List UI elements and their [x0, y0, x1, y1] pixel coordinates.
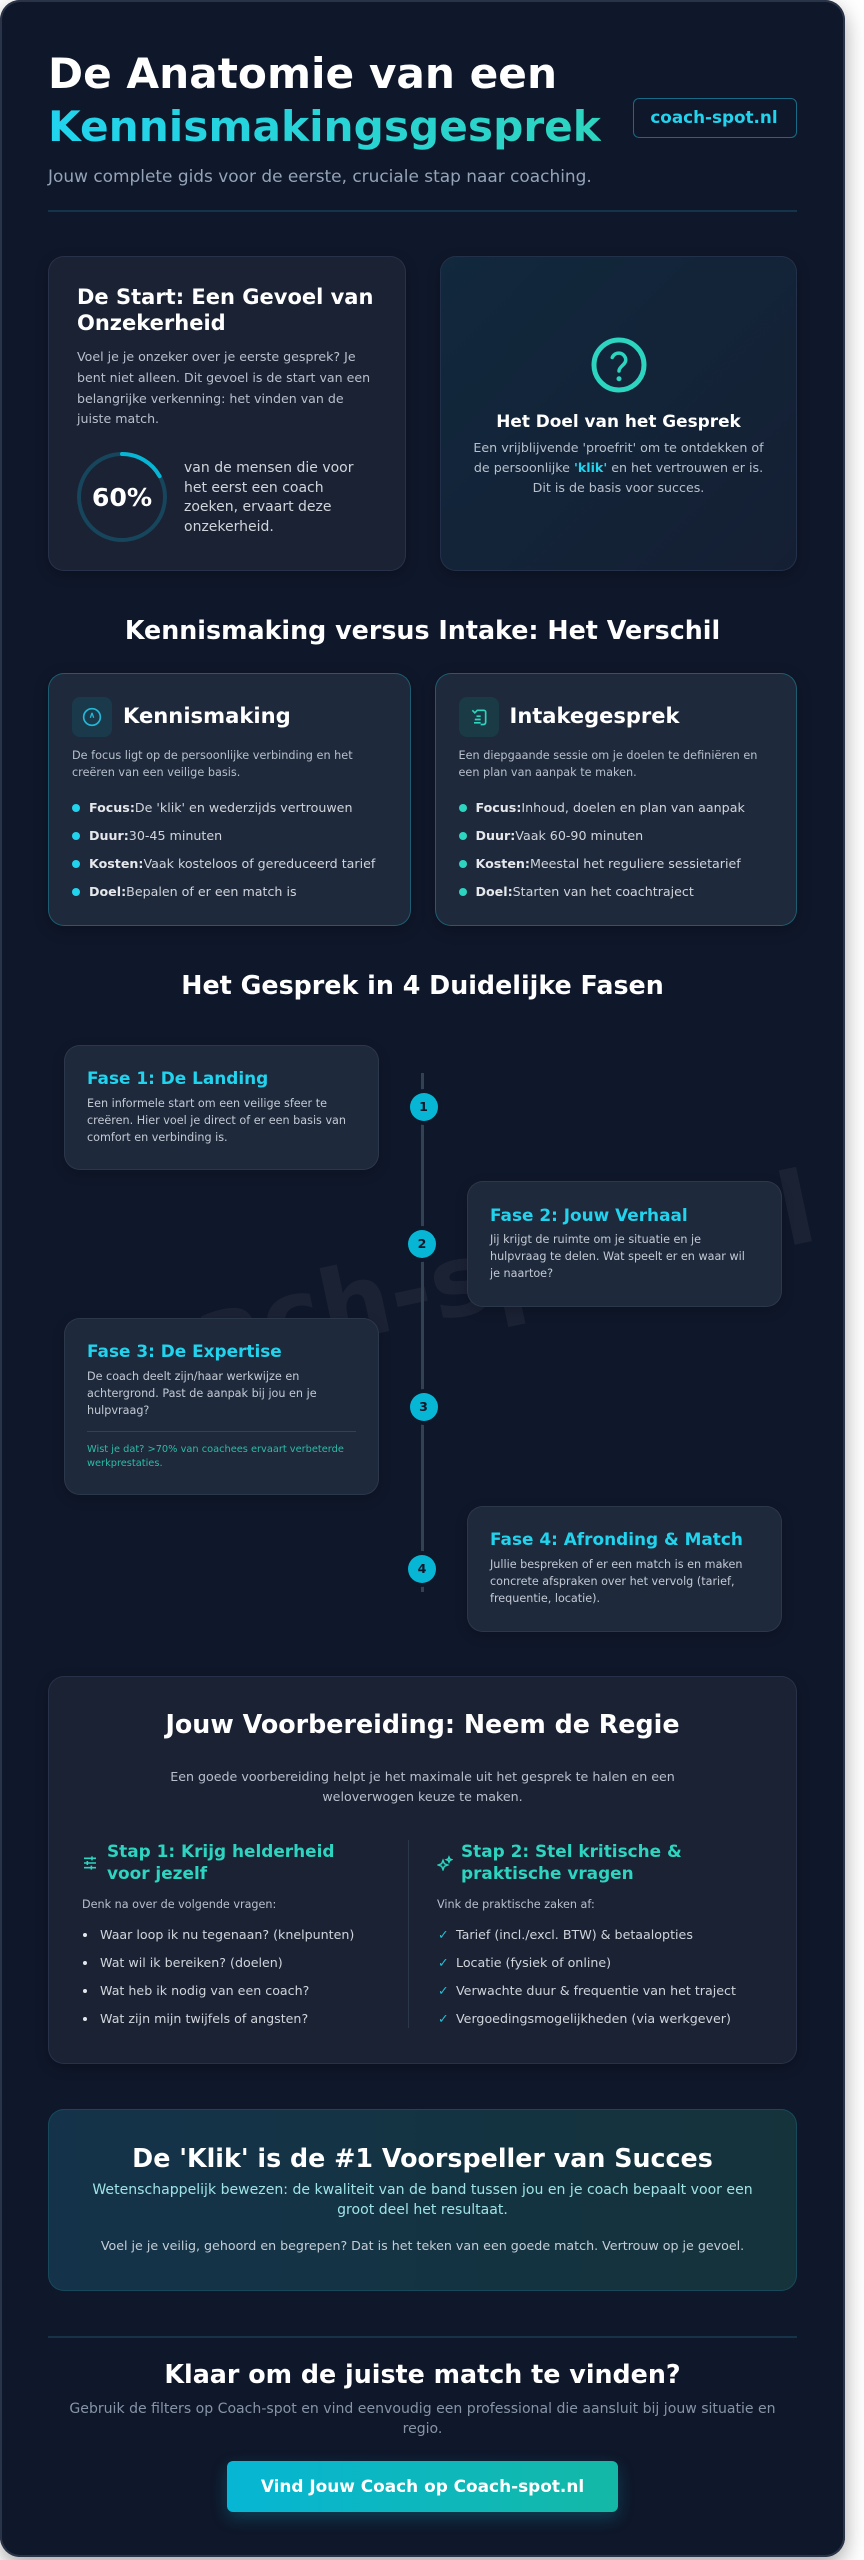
list: praktische zaken: ✓ — [438, 1983, 449, 1998]
list: praktische zaken: ✓ — [438, 1927, 449, 1942]
node 2: 2 — [418, 1236, 426, 1251]
watermark: coach-spot.nl — [59, 1148, 825, 1421]
text: statistic caption: zoeken, ervaart deze — [184, 499, 332, 515]
heading: vier fasen: Het Gesprek in 4 Duidelijke Fasen — [181, 970, 664, 1000]
icon: clipboard — [458, 697, 498, 737]
text: voorbereiding intro: weloverwogen keuze te maken. — [322, 1789, 523, 1804]
list: intake kenmerken: Duur:Vaak 60-90 minuten — [476, 828, 643, 843]
node 3: 3 — [419, 1399, 428, 1414]
text: call to action: regio. — [403, 2421, 442, 2437]
text: vertrouw op je gevoel: Voel je je veilig, gehoord en begrepen? Dat is het teken van een goede match. Vertrouw op je gevoel. — [101, 2238, 744, 2253]
text: fase 4: Jullie bespreken of er een match is en maken — [490, 1558, 742, 1571]
list: vragen: Wat wil ik bereiken? (doelen) — [100, 1955, 283, 1970]
text: intake description: Een diepgaande sessie om je doelen te definiëren en — [458, 749, 757, 762]
text: intake description: een plan van aanpak te maken. — [458, 766, 637, 779]
list: praktische zaken: ✓ — [438, 2011, 449, 2026]
heading: fase 3: Fase 3: De Expertise — [87, 1341, 282, 1361]
text: fase 3: De coach deelt zijn/haar werkwijze en — [87, 1370, 299, 1383]
list: kennismaking kenmerken: Duur:30-45 minuten — [89, 828, 222, 843]
text: fase 4 — [489, 1558, 742, 1605]
heading: stap 2: Stap 2: Stel kritische & — [461, 1841, 682, 1861]
text: fase 2: je naartoe? — [490, 1267, 553, 1280]
text: voorbereiding intro: Een goede voorbereiding helpt je het maximale uit het gesprek te halen en een — [170, 1769, 675, 1784]
heading: fase 2: Fase 2: Jouw Verhaal — [490, 1205, 688, 1225]
text: statistic caption — [184, 460, 354, 535]
node 4: 4 — [418, 1561, 426, 1576]
text: stap 1 intro: Denk na over de volgende vragen: — [82, 1898, 276, 1911]
text: fase 3 — [87, 1370, 317, 1417]
text: doel description — [473, 440, 764, 495]
callout: wist je dat — [87, 1444, 344, 1469]
list: intake kenmerken: Kosten:Meestal het reguliere sessietarief — [476, 856, 741, 871]
text: call to action: Gebruik de filters op Coach-spot en vind eenvoudig een professional die aansluit bij jouw situatie en — [69, 2401, 776, 2417]
text: onzekerheid intro: Voel je je onzeker over je eerste gesprek? Je — [77, 349, 356, 364]
list: intake kenmerken: Doel:Starten van het coachtraject — [476, 884, 694, 899]
text: fase 2: hulpvraag te delen. Wat speelt er en waar wil — [490, 1250, 745, 1263]
panel: voorbereiding — [48, 1676, 797, 2064]
brand badge — [633, 98, 797, 138]
heading: stap 1: voor jezelf — [107, 1863, 207, 1883]
heading: kennismaking versus intake: Kennismaking versus Intake: Het Verschil — [125, 615, 720, 645]
panel: het doel — [440, 256, 797, 571]
text: fase 3: hulpvraag? — [87, 1404, 149, 1417]
text: doel description: de persoonlijke 'klik' en het vertrouwen er is. — [474, 460, 763, 475]
column: stap 2 — [437, 1841, 736, 2026]
panel: fase 1 — [64, 1045, 379, 1170]
heading: stap 2: praktische vragen — [461, 1863, 634, 1883]
chart: 60% progress ring — [77, 452, 167, 542]
text: onzekerheid intro: bent niet alleen. Dit gevoel is de start van een — [77, 370, 370, 385]
text: fase 4: frequentie, locatie). — [490, 1592, 600, 1605]
node 3 — [410, 1393, 438, 1421]
title: Kennismakingsgesprek — [48, 102, 601, 151]
node 1: 1 — [419, 1099, 428, 1114]
text: fase 1: creëren. Hier voel je direct of er een basis van — [87, 1114, 346, 1127]
icon: sparkles — [437, 1855, 453, 1871]
text: onzekerheid intro: juiste match. — [77, 411, 159, 426]
callout: wist je dat: werkprestaties. — [87, 1458, 163, 1469]
panel: de klik — [48, 2109, 797, 2291]
subtitle: Jouw complete gids voor de eerste, cruciale stap naar coaching. — [48, 166, 592, 186]
text: statistic caption: onzekerheid. — [184, 519, 274, 535]
text: fase 2: Jij krijgt de ruimte om je situatie en je — [490, 1233, 701, 1246]
heading: call to action: Klaar om de juiste match te vinden? — [164, 2359, 681, 2389]
heading: fase 1: Fase 1: De Landing — [87, 1068, 268, 1088]
panel: kennismaking — [48, 673, 411, 926]
heading: de start — [77, 285, 373, 335]
list: praktische zaken: ✓ — [438, 1955, 449, 1970]
text: fase 1: Een informele start om een veilige sfeer te — [87, 1097, 327, 1110]
heading: de start: De Start: Een Gevoel van — [77, 285, 373, 309]
text: wetenschappelijk bewezen — [92, 2182, 753, 2218]
text: kennismaking description: De focus ligt op de persoonlijke verbinding en het — [72, 749, 353, 762]
text: statistic caption: van de mensen die voor — [184, 460, 354, 476]
panel: intakegesprek — [434, 673, 797, 926]
text: stap 2 intro: Vink de praktische zaken af: — [437, 1898, 595, 1911]
heading: het doel: Het Doel van het Gesprek — [496, 411, 741, 431]
text: onzekerheid intro: belangrijke verkenning: het vinden van de — [77, 391, 344, 406]
column: stap 1 — [82, 1841, 354, 2026]
heading: voorbereiding: Jouw Voorbereiding: Neem de Regie — [165, 1709, 680, 1739]
text: call to action — [69, 2401, 776, 2437]
text: fase 2 — [489, 1233, 745, 1280]
list: kennismaking kenmerken: Kosten:Vaak kosteloos of gereduceerd tarief — [89, 856, 375, 871]
node 1 — [410, 1093, 438, 1121]
icon: sliders — [84, 1856, 96, 1870]
panel: fase 2 — [467, 1181, 782, 1307]
text: intake description — [458, 749, 757, 779]
text: fase 1 — [87, 1097, 346, 1144]
panel: fase 3 — [64, 1318, 379, 1495]
text: fase 4: concrete afspraken over het vervolg (tarief, — [490, 1575, 735, 1588]
heading: fase 4: Fase 4: Afronding & Match — [490, 1529, 743, 1549]
chart: 60% progress ring: 60% — [92, 483, 152, 512]
text: kennismaking description — [72, 749, 353, 779]
list: intake kenmerken — [459, 800, 745, 899]
heading: de start: Onzekerheid — [77, 311, 226, 335]
heading: intakegesprek: Intakegesprek — [510, 704, 680, 728]
text: wetenschappelijk bewezen: groot deel het resultaat. — [337, 2202, 508, 2218]
list: vragen: Waar loop ik nu tegenaan? (knelpunten) — [100, 1927, 354, 1942]
title — [48, 49, 601, 151]
text: kennismaking description: creëren van een veilige basis. — [72, 766, 240, 779]
heading: kennismaking: Kennismaking — [123, 703, 291, 728]
panel: fase 4 — [467, 1506, 782, 1632]
text: fase 3: achtergrond. Past de aanpak bij jou en je — [87, 1387, 317, 1400]
text: doel description: Dit is de basis voor succes. — [533, 480, 704, 495]
icon: question mark — [592, 338, 646, 392]
button: vind jouw coach — [227, 2461, 618, 2512]
text: fase 1: comfort en verbinding is. — [87, 1131, 228, 1144]
button: vind jouw coach: Vind Jouw Coach op Coach-spot.nl — [261, 2476, 584, 2496]
list: vragen — [83, 1927, 354, 2026]
list: vragen: Wat heb ik nodig van een coach? — [100, 1983, 309, 1998]
list: praktische zaken: Locatie (fysiek of online) — [456, 1955, 611, 1970]
list: kennismaking kenmerken: Focus:De 'klik' en wederzijds vertrouwen — [89, 800, 352, 815]
brand badge: coach-spot.nl — [650, 107, 778, 127]
node 2 — [408, 1230, 436, 1258]
text: onzekerheid intro — [76, 349, 370, 426]
timeline: line and numbered nodes — [408, 1073, 438, 1592]
heading: stap 1 — [107, 1841, 334, 1883]
list: praktische zaken: Tarief (incl./excl. BTW) & betaalopties — [456, 1927, 693, 1942]
text: doel description: Een vrijblijvende 'proefrit' om te ontdekken of — [473, 440, 764, 455]
callout: wist je dat: Wist je dat? >70% van coachees ervaart verbeterde — [87, 1444, 344, 1455]
text: statistic caption: het eerst een coach — [184, 480, 324, 496]
list: praktische zaken: Verwachte duur & frequentie van het traject — [456, 1983, 736, 1998]
list: praktische zaken: Vergoedingsmogelijkheden (via werkgever) — [456, 2011, 731, 2026]
text: wetenschappelijk bewezen: Wetenschappelijk bewezen: de kwaliteit van de band tussen jou en je coach bepaalt voor een — [92, 2182, 753, 2198]
heading: stap 1: Stap 1: Krijg helderheid — [107, 1841, 334, 1861]
node 4 — [408, 1555, 436, 1583]
list: vragen: Wat zijn mijn twijfels of angsten? — [100, 2011, 308, 2026]
list: kennismaking kenmerken: Doel:Bepalen of er een match is — [89, 884, 297, 899]
title: De Anatomie van een — [48, 49, 557, 98]
heading: de klik: De 'Klik' is de #1 Voorspeller van Succes — [132, 2143, 713, 2173]
heading: stap 2 — [461, 1841, 682, 1883]
panel: de start — [48, 256, 406, 571]
list: praktische zaken — [438, 1927, 736, 2026]
text: voorbereiding intro — [170, 1769, 675, 1804]
list: kennismaking kenmerken — [72, 800, 376, 899]
icon: compass — [72, 697, 112, 737]
list: intake kenmerken: Focus:Inhoud, doelen en plan van aanpak — [476, 800, 745, 815]
